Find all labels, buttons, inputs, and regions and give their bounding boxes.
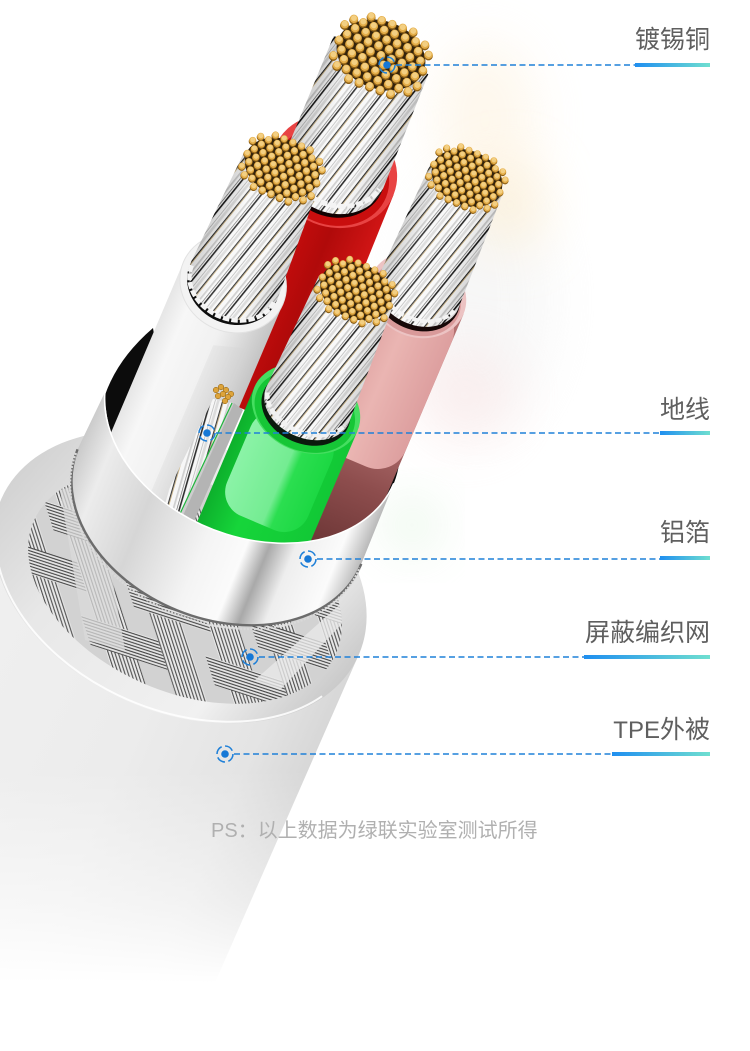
pink insulation [263, 275, 463, 570]
braid highlights [60, 480, 350, 690]
white ground-side wire [76, 120, 343, 557]
foil opening highlight [72, 370, 394, 586]
red wire tinned copper [326, 8, 435, 103]
thin ground wire strands [159, 399, 243, 526]
foil lower edge [36, 449, 361, 668]
red wire [179, 0, 454, 431]
pink wire silver strands [366, 161, 507, 339]
green rim [238, 347, 374, 470]
callout: 铝箔 [300, 519, 710, 567]
right dark crescent [386, 466, 399, 496]
jacket rim [0, 375, 413, 779]
callout: 镀锡铜 [379, 26, 710, 73]
green wire tinned copper [311, 251, 401, 331]
red wire silver strands [270, 36, 429, 229]
callout: 镀锡铜: 镀锡铜 [635, 26, 710, 54]
pink wire tinned copper [423, 139, 511, 218]
pink rim [355, 237, 480, 353]
aluminium foil band [34, 369, 394, 672]
callout: TPE外被 [217, 716, 710, 762]
jacket fade to white [0, 770, 420, 1012]
callout: 地线 [199, 396, 710, 441]
white wire tinned copper [235, 127, 329, 210]
outer TPE jacket [0, 375, 420, 1012]
callout: 地线: 地线 [660, 396, 710, 424]
background colour glows [388, 40, 550, 551]
red insulation [179, 147, 394, 431]
green highlight [217, 403, 342, 540]
green wire [179, 244, 418, 607]
green wire silver strands [253, 273, 397, 453]
footnote: PS：以上数据为绿联实验室测试所得 [211, 819, 538, 842]
callout: 屏蔽编织网: 屏蔽编织网 [585, 619, 710, 647]
callout: TPE外被: TPE外被 [613, 716, 710, 744]
left dark crescent [105, 328, 165, 440]
pink wire [263, 133, 524, 570]
translucent sleeve reflection [143, 336, 247, 523]
callout: 屏蔽编织网 [242, 619, 710, 665]
green insulation [179, 387, 358, 607]
red rim [254, 95, 414, 247]
jacket body [0, 540, 359, 1010]
thin ground wire copper [213, 384, 234, 404]
white wire silver strands [176, 150, 325, 334]
white rim [164, 217, 302, 349]
braided shield [28, 484, 342, 704]
callout: 铝箔: 铝箔 [660, 519, 710, 547]
white insulation [76, 262, 283, 557]
